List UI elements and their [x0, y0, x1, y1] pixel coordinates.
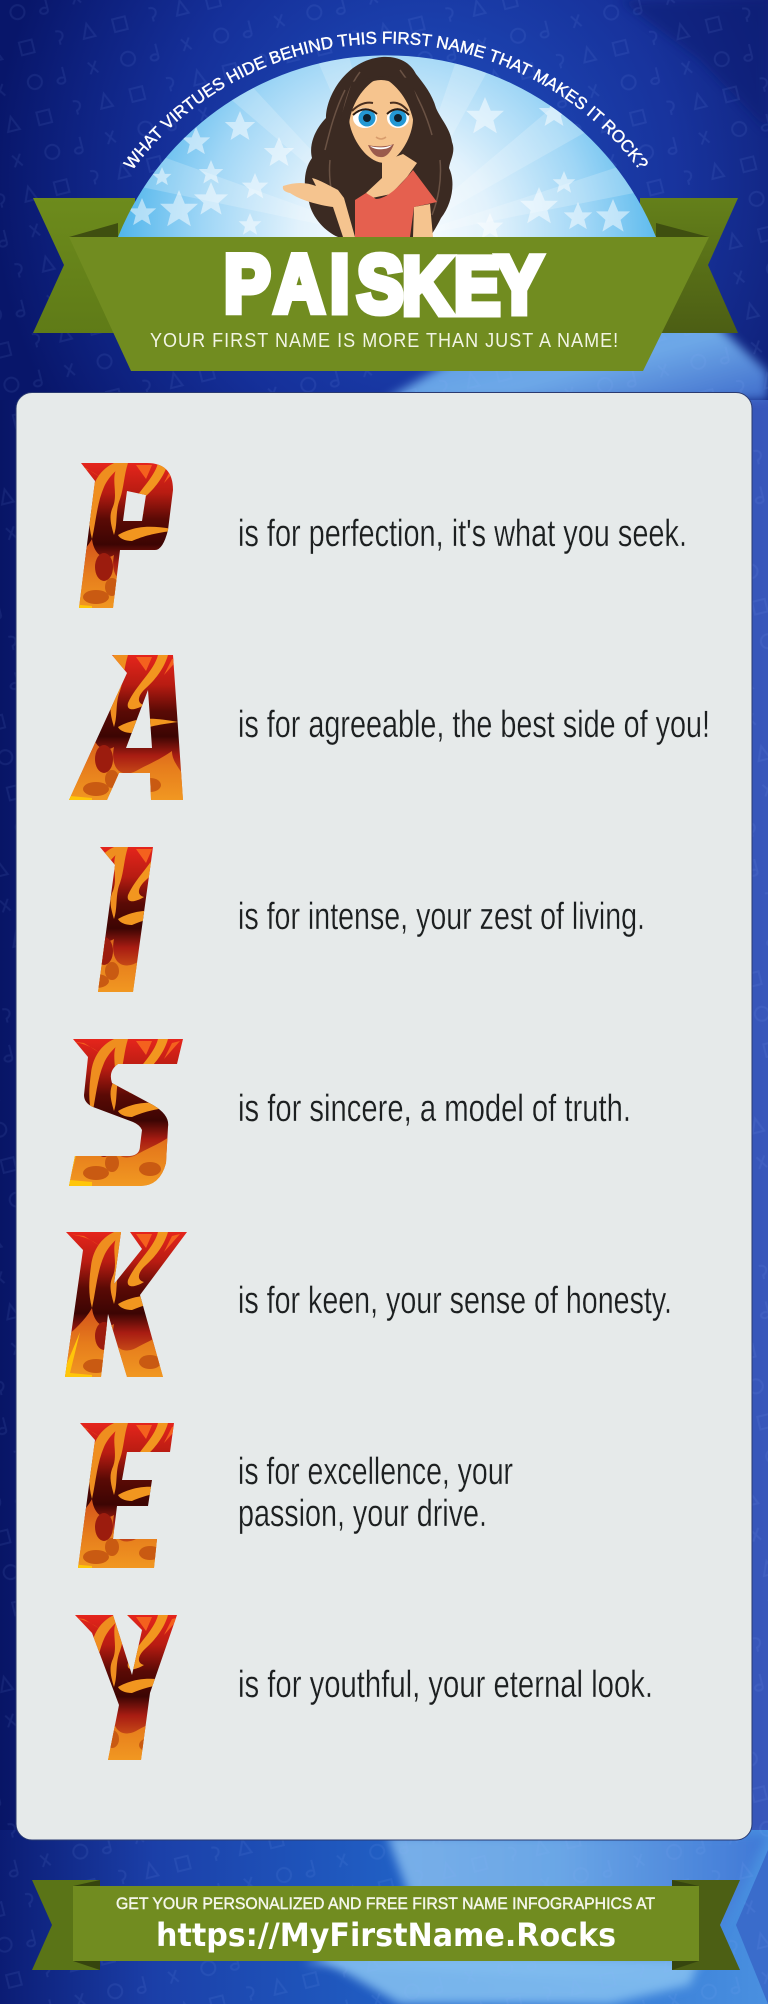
name title: PAISKEY	[224, 239, 542, 332]
row Y	[58, 1615, 653, 1765]
arc heading: WHAT VIRTUES HIDE BEHIND THIS FIRST NAME THAT MAKES IT ROCK?	[122, 32, 648, 168]
footer ribbon	[32, 1880, 740, 1970]
panel: letters	[16, 392, 752, 1840]
ribbon fold left	[69, 223, 118, 237]
panel background	[16, 392, 752, 1840]
subtitle: YOUR FIRST NAME IS MORE THAN JUST A NAME!	[150, 330, 618, 352]
sunburst dome	[118, 55, 656, 237]
text S: is for sincere, a model of truth.	[238, 1088, 631, 1130]
letter A	[69, 655, 183, 800]
text E: passion, your drive.	[238, 1493, 487, 1535]
row K	[58, 1232, 672, 1382]
footer band	[73, 1886, 699, 1961]
header	[33, 32, 738, 371]
letter P	[79, 463, 173, 608]
ribbon fold right	[656, 223, 709, 237]
text Y: is for youthful, your eternal look.	[238, 1664, 653, 1706]
row S	[58, 1039, 631, 1189]
footer url: https://MyFirstName.Rocks	[156, 1916, 616, 1954]
footer left tail	[32, 1880, 100, 1970]
letter Y	[75, 1615, 177, 1760]
row P	[58, 463, 687, 613]
ribbon front	[69, 237, 709, 371]
row I	[98, 847, 642, 992]
footer caption: GET YOUR PERSONALIZED AND FREE FIRST NAME INFOGRAPHICS AT	[116, 1894, 655, 1913]
footer right tail	[672, 1880, 740, 1970]
row E	[58, 1423, 513, 1573]
footer folds	[73, 1880, 699, 1970]
letter K	[65, 1232, 187, 1377]
text I: is for intense, your zest of living.	[238, 896, 645, 938]
ribbon back right tail	[640, 198, 738, 333]
row A	[58, 655, 710, 805]
letter I	[98, 847, 153, 992]
letter S	[69, 1039, 183, 1186]
text E: is for excellence, your	[238, 1451, 513, 1493]
character	[283, 57, 453, 237]
ribbon back left tail	[33, 198, 135, 333]
letter E	[78, 1423, 174, 1568]
